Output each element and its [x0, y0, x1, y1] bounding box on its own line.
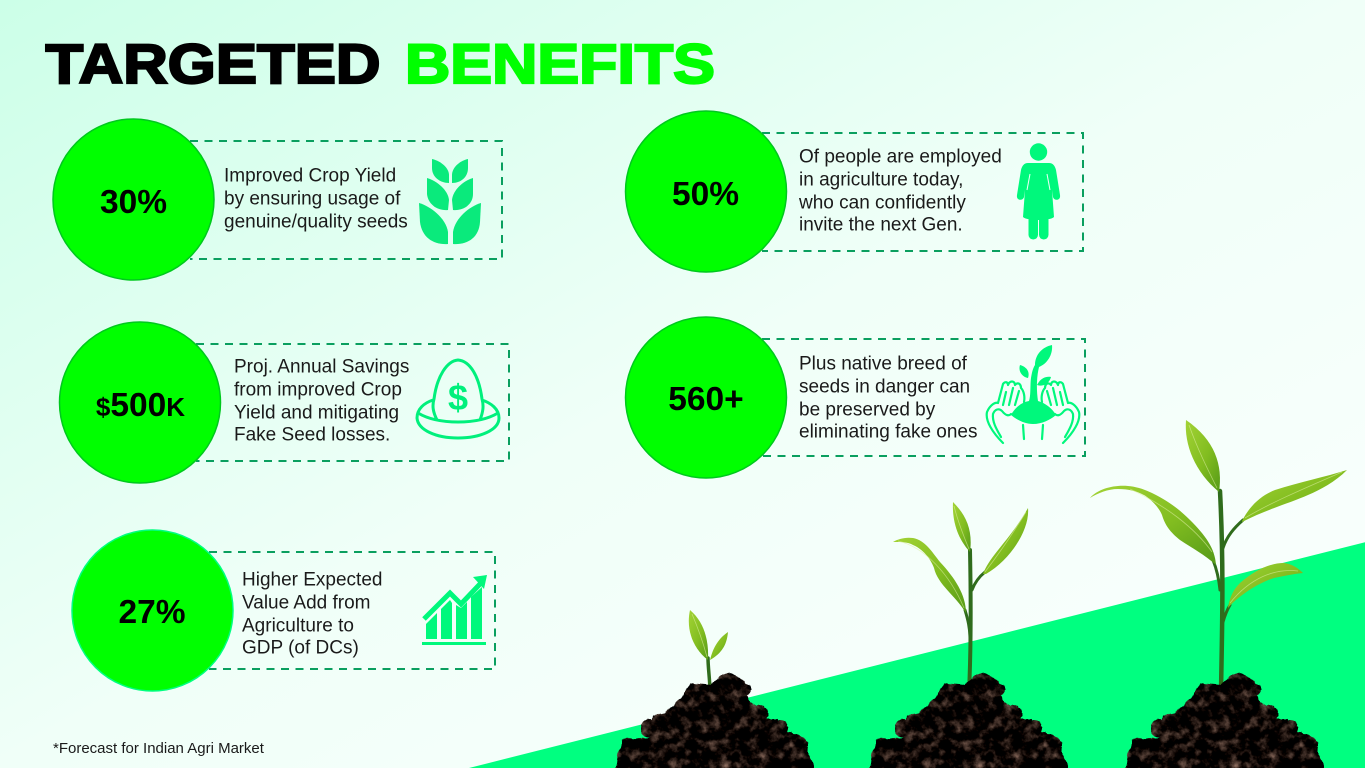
soil mound	[1125, 673, 1325, 768]
icon: wheat	[419, 159, 481, 244]
panel: 560+ native seeds	[626, 317, 1085, 478]
stem	[1220, 491, 1222, 692]
stat value: 560+: 560+	[668, 381, 744, 418]
icon: egg in nest with dollar	[417, 360, 499, 438]
description: savings: from improved Crop	[234, 380, 402, 400]
stat circle: 30%	[53, 119, 214, 280]
stat value: $500K: $500K	[96, 387, 185, 424]
panel: $500K savings	[60, 322, 509, 483]
soil mound	[869, 673, 1069, 768]
leaves	[1186, 420, 1220, 492]
icon: hands holding sprout	[987, 345, 1079, 443]
title: BENEFITS	[405, 33, 715, 95]
description: crop yield: by ensuring usage of	[224, 188, 401, 210]
stat circle: 560+	[626, 317, 786, 478]
description: native seeds: Plus native breed of	[799, 354, 968, 374]
icon: egg in nest with dollar: $	[448, 377, 468, 418]
soil mound	[615, 673, 815, 768]
stem	[708, 658, 710, 692]
panel: 27% value add	[72, 530, 495, 691]
stat circle: 50%	[626, 111, 786, 272]
description: employment: Of people are employed	[799, 146, 1002, 168]
icon: woman	[1017, 143, 1060, 240]
description: native seeds: be preserved by	[799, 400, 936, 420]
footnote: *Forecast for Indian Agri Market	[53, 740, 265, 757]
stat value: 27%: 27%	[118, 594, 186, 631]
description: crop yield: Improved Crop Yield	[224, 166, 396, 186]
green diagonal band	[469, 542, 1366, 768]
description: savings: Yield and mitigating	[234, 402, 399, 424]
description: value add: GDP (of DCs)	[242, 638, 359, 658]
leaves	[689, 610, 708, 660]
title	[46, 33, 715, 95]
description: crop yield: genuine/quality seeds	[224, 212, 408, 232]
stat value: 30%: 30%	[100, 184, 167, 221]
plant: medium seedling	[869, 502, 1069, 768]
stat circle: 27%	[72, 530, 233, 691]
stat value: 50%: 50%	[672, 176, 739, 213]
description: savings: Fake Seed losses.	[234, 424, 390, 446]
description: employment: in agriculture today,	[799, 170, 963, 190]
panel: 50% employed	[626, 111, 1083, 272]
icon: rising bar chart	[422, 575, 487, 645]
plant: small seedling	[615, 610, 815, 768]
stat circle: $500K	[60, 322, 220, 483]
description: native seeds: eliminating fake ones	[799, 422, 978, 442]
stem	[969, 550, 971, 692]
description: native seeds: seeds in danger can	[799, 376, 970, 398]
description: value add: Value Add from	[242, 592, 371, 614]
title: TARGETED	[46, 33, 380, 95]
leaves	[953, 502, 971, 552]
description: savings: Proj. Annual Savings	[234, 356, 409, 378]
description: value add: Higher Expected	[242, 570, 382, 590]
description: employment: invite the next Gen.	[799, 214, 963, 236]
panel: 30% crop yield	[53, 119, 502, 280]
plant: tall seedling	[1090, 420, 1347, 768]
description: employment: who can confidently	[798, 192, 966, 214]
description: value add: Agriculture to	[242, 616, 354, 636]
